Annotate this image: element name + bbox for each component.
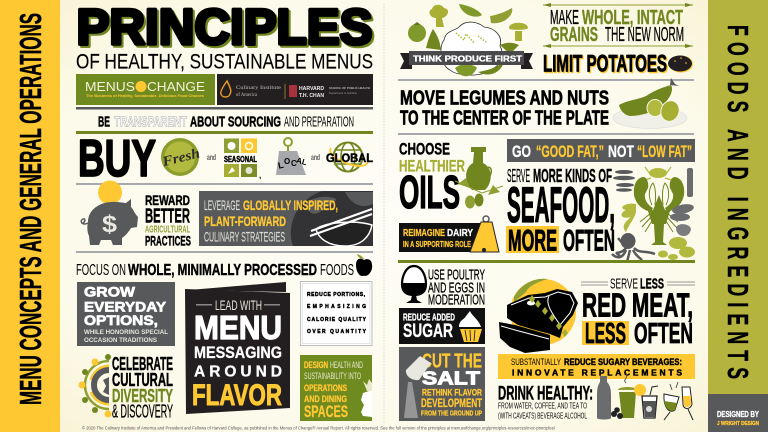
heading: whole intact grains: GRAINS [550, 24, 598, 46]
ribbon: think produce first [400, 51, 533, 69]
icon: egg in cup [402, 266, 426, 303]
logo: Menus of Change: CHANGE [147, 80, 205, 94]
subtitle: OF HEALTHY, SUSTAINABLE MENUS [76, 50, 373, 74]
icon: steak [499, 279, 578, 353]
panel: reduce sugary beverages: INNOVATE REPLACEMENTS [512, 368, 682, 378]
text: poultry and eggs: MODERATION [428, 292, 485, 308]
text: drink healthy [498, 384, 593, 420]
heading: serve less red meat [581, 276, 695, 350]
panel: design spaces: OPERATIONS [304, 383, 347, 393]
panel: reimagine dairy: REIMAGINE [403, 227, 445, 239]
text: reward better practices [145, 192, 191, 248]
panel: reduce added sugar [399, 308, 485, 344]
icon: fresh badge [160, 138, 202, 176]
panel: design spaces: SPACES [304, 402, 348, 421]
heading: choose healthier oils: HEALTHIER [399, 156, 465, 176]
icon: local weight: AL [295, 156, 308, 167]
panel: grow everyday options: WHILE HONORING SPECIAL [84, 329, 168, 336]
text: SEAFOOD, [507, 177, 615, 233]
panel: reimagine dairy [399, 223, 486, 252]
heading: limit potatoes: LIMIT POTATOES [544, 52, 668, 78]
icon: legumes on plate [613, 78, 687, 128]
panel: reimagine dairy: DAIRY [447, 227, 473, 239]
panel: reduce sugary beverages: REDUCE SUGARY BEVERAGES: [564, 357, 682, 367]
text: reward better practices: REWARD [145, 192, 190, 208]
icon: fresh badge: Fresh [160, 146, 202, 170]
heading: choose healthier oils: CHOOSE [399, 140, 450, 158]
panel: reduce portions: EMPHASIZING [307, 304, 366, 310]
panel: globally inspired [199, 191, 373, 246]
logos: Culinary Institute and Harvard: Culinary Institute [236, 85, 282, 91]
text: drink healthy: DRINK HEALTHY: [498, 384, 593, 404]
icon: piggy bank [81, 180, 138, 245]
panel: grow everyday options: GROW [84, 284, 136, 300]
heading: limit potatoes [543, 50, 668, 78]
heading: more kinds of seafood: OFTEN [563, 224, 615, 258]
heading: legumes and nuts: TO THE CENTER OF THE PLATE [400, 108, 609, 130]
panel: grow everyday options: OCCASION TRADITIONS [84, 337, 158, 344]
panel: good fat not low fat: GO [512, 142, 531, 161]
icon: global: GLOBAL [326, 153, 373, 165]
icon: produce group [408, 4, 528, 76]
panel: reduce portions: CALORIE QUALITY [307, 317, 367, 323]
logos: Culinary Institute and Harvard: of America [236, 91, 257, 98]
heading: whole intact grains: WHOLE, INTACT [582, 7, 683, 29]
heading: legumes and nuts: MOVE LEGUMES AND NUTS [400, 88, 609, 110]
panel: design spaces: DESIGN [304, 360, 328, 370]
icon: piggy bank: $ [102, 211, 118, 238]
text: AND PREPARATION [284, 114, 354, 130]
title: PRINCIPLES [76, 0, 372, 55]
text: celebrate cultural diversity: CULTURAL [112, 370, 173, 390]
icon: local weight: C [291, 159, 297, 168]
logos: Culinary Institute and Harvard: Department of Nutrition [329, 92, 358, 95]
panel: grow everyday options: OPTIONS, [84, 312, 158, 328]
panel: menu messaging: MESSAGING [194, 343, 282, 362]
text: poultry and eggs: USE POULTRY [428, 268, 485, 284]
heading: serve less red meat: RED MEAT, [582, 286, 693, 324]
icon: global [326, 142, 373, 172]
panel: design spaces: AND DINING [304, 394, 347, 404]
panel: globally inspired: PLANT-FORWARD [204, 213, 286, 229]
designer credit [708, 394, 768, 432]
text: celebrate cultural diversity [112, 354, 173, 422]
designer credit: J WRIGHT DESIGN [717, 421, 759, 427]
ribbon: think produce first: THINK PRODUCE FIRST [413, 54, 522, 64]
icon: local weight: O [284, 157, 290, 166]
panel: cut the salt: FROM THE GROUND UP [421, 408, 482, 418]
panel: menu messaging: FLAVOR [192, 379, 282, 412]
text: poultry and eggs [428, 268, 485, 308]
panel: reduce added sugar: REDUCE ADDED [403, 312, 455, 324]
panel: good fat not low fat: “LOW FAT” [637, 142, 692, 161]
panel: reduce sugary beverages [498, 354, 695, 379]
heading: focus on whole foods: FOODS [320, 262, 354, 279]
text: poultry and eggs: AND EGGS IN [428, 280, 485, 296]
icon: potato [668, 56, 693, 72]
text: drink healthy: (WITH CAVEATS) BEVERAGE ALCOHOL [498, 410, 587, 420]
heading: focus on whole foods: WHOLE, MINIMALLY PROCESSED [128, 262, 317, 279]
panel: cut the salt: RETHINK FLAVOR [422, 388, 482, 398]
panel: reduce portions: REDUCE PORTIONS, [307, 292, 366, 298]
logos: Culinary Institute and Harvard: SCHOOL OF PUBLIC HEALTH [329, 86, 370, 90]
heading: be transparent: BE [98, 114, 110, 130]
panel: menu messaging: AROUND [194, 364, 282, 380]
icon: seasonal: , [259, 171, 261, 180]
heading: more kinds of seafood: MORE [508, 224, 557, 258]
panel: cut the salt: DEVELOPMENT [421, 396, 482, 410]
panel: reduce sugary beverages: SUBSTANTIALLY [511, 357, 561, 367]
panel: reduce portions: OVER QUANTITY [307, 329, 367, 335]
icon: oil bottle and olives [455, 147, 503, 208]
and: and [207, 153, 216, 162]
panel: good fat not low fat: NOT [608, 142, 634, 161]
icon: beverages [597, 373, 693, 420]
heading: be transparent: ABOUT SOURCING [190, 114, 281, 130]
logos: Culinary Institute and Harvard [217, 74, 373, 105]
panel: cut the salt: CUT THE [422, 350, 482, 372]
logo: Menus of Change: The Business of Healthy, Sustainable, Delicious Food Choices [86, 94, 204, 98]
panel: right sidebar [708, 0, 768, 432]
panel: menu messaging [185, 282, 290, 414]
panel: design spaces [300, 355, 372, 421]
heading: be transparent [98, 114, 354, 130]
panel: menu messaging: MENU [194, 309, 282, 346]
heading: choose healthier oils: OILS [399, 166, 460, 218]
heading: whole intact grains: MAKE [550, 7, 579, 29]
heading: be transparent: TRANSPARENT [114, 114, 187, 130]
heading: whole intact grains: THE NEW NORM [605, 24, 684, 46]
panel: design spaces: SUSTAINABILITY INTO [304, 371, 361, 381]
panel: reduce portions [300, 282, 372, 346]
text: drink healthy: FROM WATER, COFFEE, AND TEA TO [498, 400, 587, 410]
panel: cut the salt: SALT [422, 368, 481, 388]
panel: design spaces: HEALTH AND [330, 360, 363, 370]
title: PRINCIPLES [78, 1, 374, 57]
panel: grow everyday options: EVERYDAY [84, 298, 167, 314]
heading: whole intact grains [543, 3, 693, 48]
panel: reimagine dairy: IN A SUPPORTING ROLE [403, 239, 471, 249]
heading: focus on whole foods: FOCUS ON [76, 262, 126, 279]
heading: serve less red meat: SERVE [610, 276, 638, 292]
footer note: © 2020 The Culinary Institute of America and President and Fellows of Harvard College, as published in the Menus of Change® Annual Report. All rights reserved. See the full version of the principles at menusofchange.org/principles-resources/moc-principles/ [82, 424, 556, 430]
text: reward better practices: PRACTICES [145, 232, 191, 248]
icon: seafood group [612, 167, 695, 262]
icon: seasonal [224, 138, 261, 180]
heading: more kinds of seafood: SERVE [507, 165, 530, 186]
heading: more kinds of seafood: MORE KINDS OF [533, 165, 612, 186]
text: celebrate cultural diversity: CELEBRATE [112, 354, 173, 374]
panel: grow everyday options [77, 282, 175, 346]
heading: choose healthier oils [399, 140, 465, 218]
text: reward better practices: AGRICULTURAL [145, 224, 190, 236]
and: and [311, 153, 320, 162]
panel: cut the salt [399, 347, 485, 421]
heading: serve less red meat: LESS [640, 276, 664, 292]
panel: good fat not low fat: “GOOD FAT,” [536, 142, 604, 161]
icon: local weight: L [277, 160, 285, 171]
icon: apple [356, 254, 372, 276]
panel: reduce added sugar: SUGAR [403, 321, 453, 342]
heading: buy: BUY [78, 130, 156, 188]
heading: more kinds of seafood [506, 165, 615, 258]
heading: serve less red meat: OFTEN [634, 318, 693, 350]
panel: menu messaging: LEAD WITH [215, 297, 262, 313]
text: celebrate cultural diversity: DIVERSITY [112, 386, 173, 406]
icon: cultural gear [78, 354, 112, 418]
panel: globally inspired: GLOBALLY INSPIRED, [243, 197, 338, 213]
icon: local weight [276, 138, 308, 175]
heading: serve less red meat: LESS [585, 318, 626, 350]
panel: right sidebar: FOODS AND INGREDIENTS [721, 25, 752, 379]
text: reward better practices: BETTER [145, 206, 190, 228]
center divider [383, 4, 385, 424]
panel: good fat not low fat [507, 139, 695, 162]
heading: legumes and nuts [400, 88, 609, 130]
logo: Menus of Change [76, 74, 215, 105]
icon: cow bell [470, 216, 499, 252]
panel: left sidebar [0, 0, 60, 432]
panel: globally inspired: LEVERAGE [204, 197, 240, 213]
logo: Menus of Change: MENUS [85, 80, 135, 94]
heading: limit potatoes: LIMIT POTATOES [543, 50, 667, 78]
text: & DISCOVERY [112, 402, 173, 422]
icon: seasonal: SEASONAL [224, 155, 257, 164]
logos: Culinary Institute and Harvard: HARVARD [299, 86, 324, 92]
logos: Culinary Institute and Harvard: T.H. CHAN [299, 93, 324, 99]
panel: globally inspired: CULINARY STRATEGIES [204, 228, 285, 244]
